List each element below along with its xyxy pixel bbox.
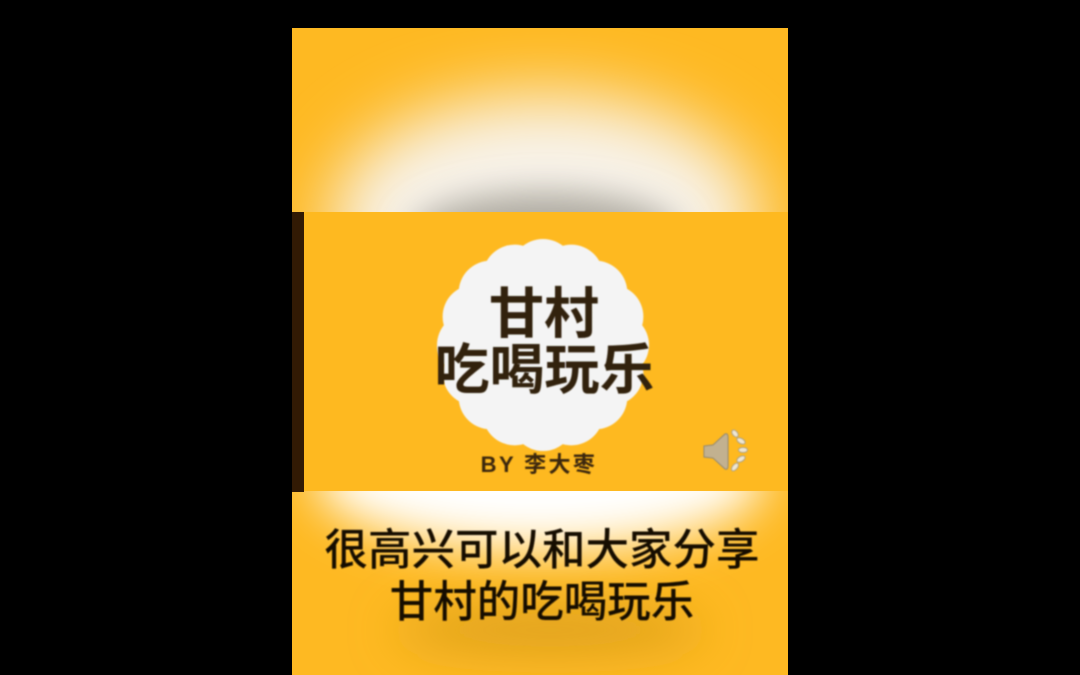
caption [324,527,760,627]
top glow with shadow [292,40,788,212]
scalloped badge [433,235,653,455]
badge title: 吃喝玩乐 [434,339,655,401]
title band [292,212,788,492]
badge title [434,283,655,401]
slide panel [292,28,788,675]
byline: BY 李大枣 [481,452,597,477]
bottom glow with shadow [292,491,788,668]
badge title: 甘村 [489,283,599,345]
icon: speaker [704,429,748,472]
band accent bar [292,212,304,492]
caption: 甘村的吃喝玩乐 [390,579,694,627]
caption: 很高兴可以和大家分享 [324,527,760,575]
